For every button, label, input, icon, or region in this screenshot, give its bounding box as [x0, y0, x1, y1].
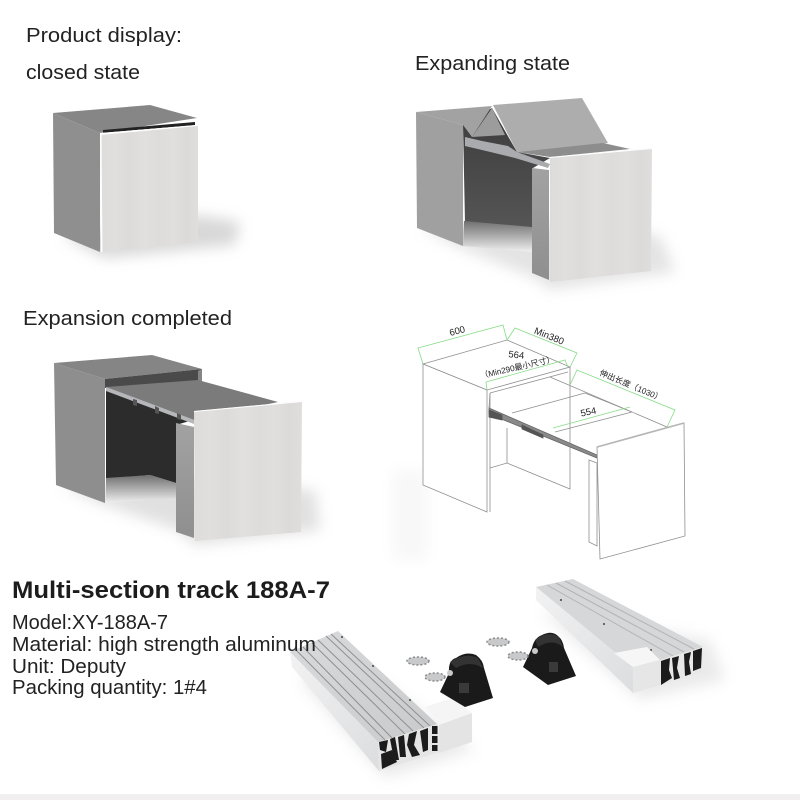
caption: product display closed state [26, 25, 182, 84]
product heading: Multi-section track 188A-7 [12, 577, 330, 604]
caption: expansion completed: Expansion completed [23, 308, 232, 330]
left bracket [440, 654, 493, 707]
small connector plates [407, 638, 528, 681]
specification text [12, 612, 316, 699]
dimension labels: 伸出长度（1030） [598, 367, 664, 403]
specification text: Unit: Deputy [12, 656, 126, 678]
specification text: Packing quantity: 1#4 [12, 677, 207, 699]
cabinet: expansion completed [54, 355, 320, 545]
right bracket [523, 633, 576, 685]
caption: expanding state: Expanding state [415, 53, 570, 75]
cabinet: expanding state [416, 98, 675, 290]
left aluminum track [290, 631, 475, 778]
cabinet outline [423, 340, 685, 559]
dimension labels [448, 324, 664, 420]
bottom band [0, 794, 800, 800]
dimension labels: 554 [580, 406, 597, 420]
specification text: Model:XY-188A-7 [12, 612, 168, 634]
cabinet: closed state [53, 105, 240, 258]
dimension labels: 564 [508, 349, 525, 362]
dimension labels: Min380 [532, 326, 565, 348]
faint shadow beside drawing [392, 470, 428, 560]
green dimension lines [418, 325, 675, 428]
caption: product display closed state: Product display: [26, 25, 182, 47]
specification text: Material: high strength aluminum [12, 634, 316, 656]
dimension labels: （Min290最小尺寸） [479, 354, 555, 380]
caption: product display closed state: closed state [26, 62, 140, 84]
dimension line drawing [418, 325, 685, 559]
right aluminum track [536, 579, 725, 700]
dimension labels: 600 [448, 324, 466, 339]
